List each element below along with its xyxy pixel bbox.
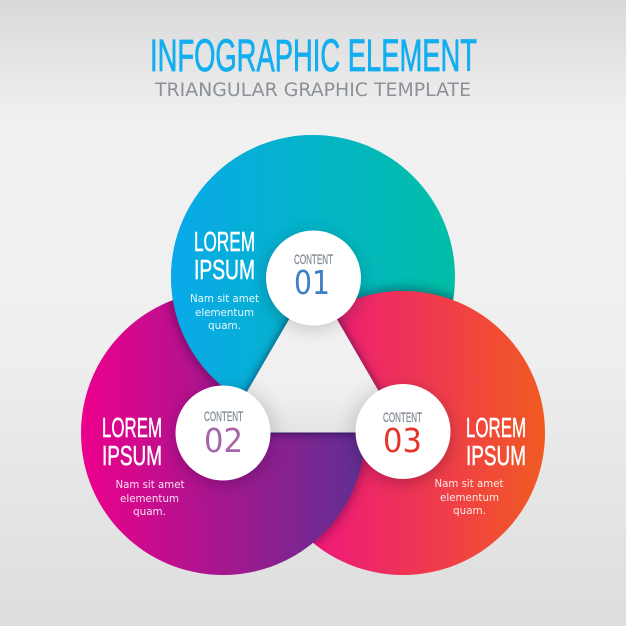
text block: blue body xyxy=(190,293,259,332)
text block: blue heading xyxy=(194,226,255,285)
text block: blue heading: LOREM xyxy=(194,226,255,257)
text block: red body: quam. xyxy=(453,505,486,517)
badge: 01 xyxy=(266,230,361,326)
number: 01: 01 xyxy=(294,263,330,302)
text block: purple heading: IPSUM xyxy=(102,440,162,471)
badge: 03 xyxy=(356,384,450,479)
text block: purple heading: LOREM xyxy=(102,412,162,443)
text block: purple body: quam. xyxy=(133,506,166,518)
number: 02: 02 xyxy=(204,421,243,460)
text block: blue heading: IPSUM xyxy=(194,254,255,285)
text block: red body xyxy=(434,478,504,517)
text block: blue body: quam. xyxy=(208,320,241,332)
text block: purple heading xyxy=(102,412,162,471)
shadows: small circles on large circles xyxy=(175,234,451,485)
shadow: blue circle on purple xyxy=(166,300,222,386)
number: 03: 03 xyxy=(383,421,422,460)
text block: blue body: Nam sit amet xyxy=(190,293,259,305)
centre triangle xyxy=(246,318,378,434)
text block: red body: Nam sit amet xyxy=(434,478,504,490)
text block: red heading xyxy=(466,412,526,471)
label: content 01: CONTENT xyxy=(294,251,333,267)
shadow: triangle on circles xyxy=(241,316,385,440)
circle: blue 01 xyxy=(171,135,455,419)
shadow: purple circle on red xyxy=(313,457,369,548)
text block: purple body xyxy=(116,479,184,518)
badge: 02 xyxy=(176,386,270,480)
circle: red 03 xyxy=(261,291,545,575)
subtitle: TRIANGULAR GRAPHIC TEMPLATE xyxy=(154,79,471,101)
text block: red heading: IPSUM xyxy=(466,440,526,471)
text block: red heading: LOREM xyxy=(466,412,526,443)
text block: purple body: elementum xyxy=(120,493,179,505)
text block: blue body: elementum xyxy=(195,307,254,319)
circle: blue 01 overlap wedge xyxy=(171,135,312,392)
text block: red body: elementum xyxy=(440,492,499,504)
label: content 03: CONTENT xyxy=(383,409,422,425)
text block: purple body: Nam sit amet xyxy=(116,479,184,491)
circle: purple 02 xyxy=(81,291,365,575)
triangle inner shadows xyxy=(247,319,378,432)
panel: circles with overlapping gradients xyxy=(81,135,546,576)
label: content 02: CONTENT xyxy=(204,408,243,424)
shadow: red circle on blue xyxy=(356,282,454,300)
